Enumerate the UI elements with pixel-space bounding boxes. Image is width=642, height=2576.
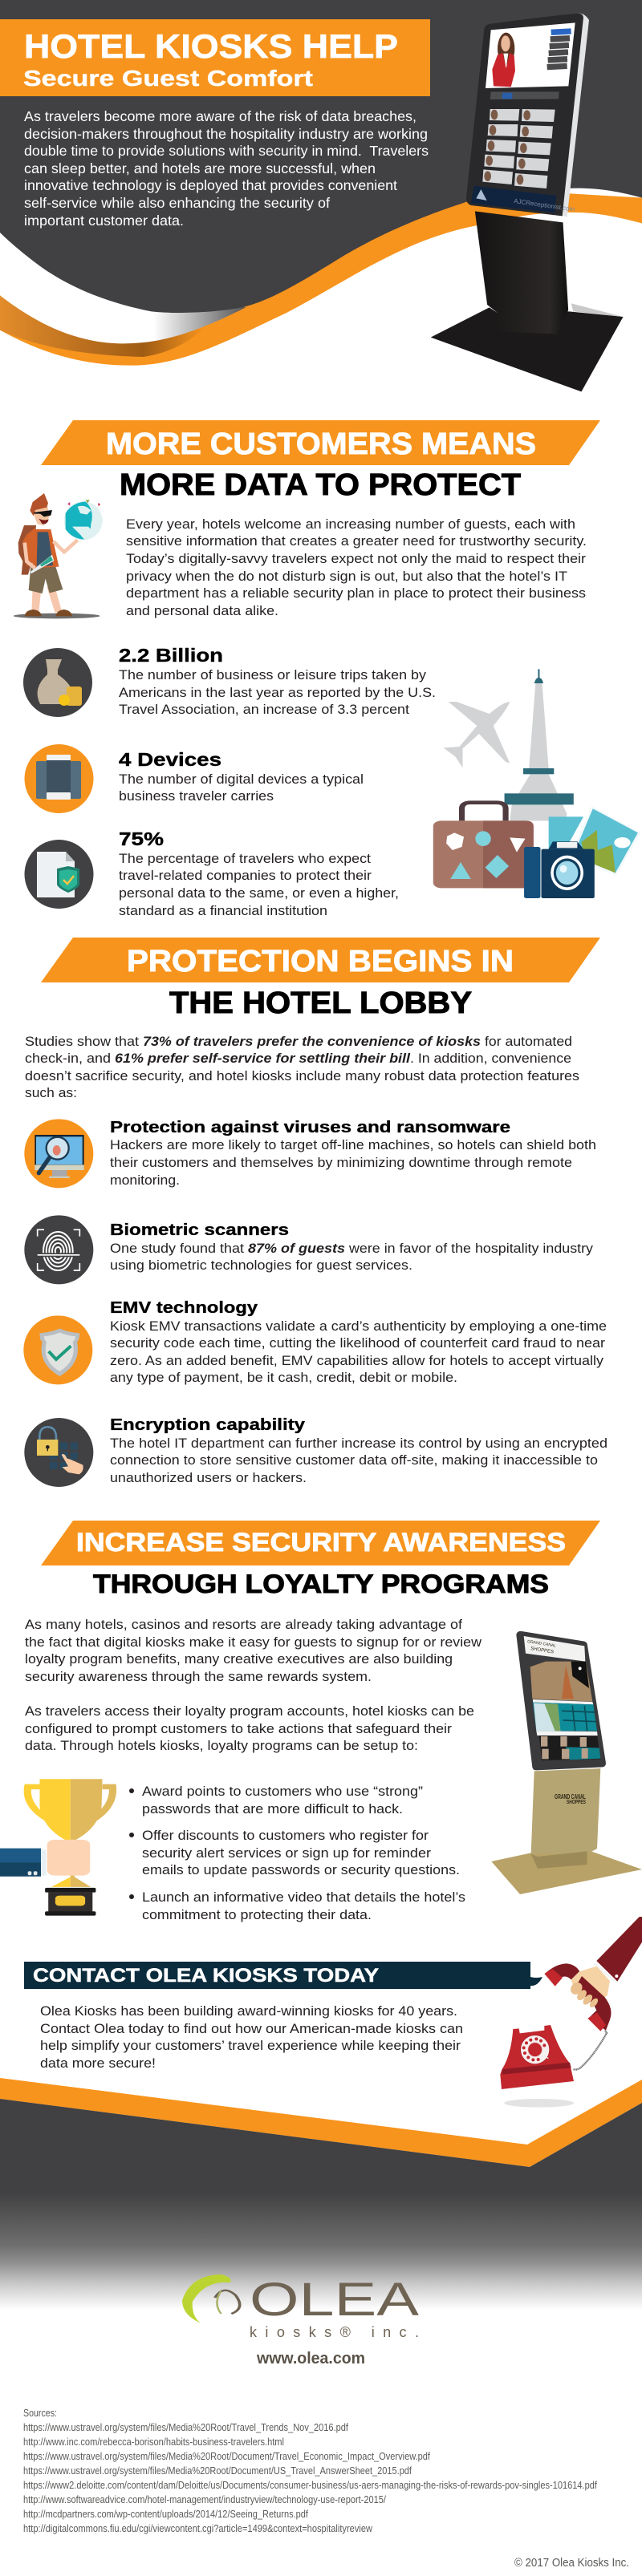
kiosk footer label: AJCReceptionist.com [514,197,575,213]
illustration: red telephone and hand [500,1917,642,2108]
illustration: photos and camera [524,806,640,898]
bullet list: commitment to protecting their data. [142,1907,372,1922]
section 2 paragraph: check-in, and [25,1051,111,1066]
section 2 paragraph: . In addition, convenience [410,1051,571,1066]
sources: http://www.inc.com/rebecca-borison/habits-business-travelers.html [23,2436,284,2448]
icon: security shield [23,1315,92,1384]
section 2 paragraph: Studies show that [25,1034,139,1049]
section 3 paragraphs: security awareness through the same rewards system. [25,1669,372,1684]
title banner: HOTEL KIOSKS HELP [24,27,398,65]
bullet list: passwords that are more difficult to hack. [142,1801,403,1817]
section 3 heading: THROUGH LOYALTY PROGRAMS [93,1569,549,1598]
feature: encryption capability: unauthorized users or hackers. [110,1470,307,1485]
kiosk branding: SHOPPES [567,1800,586,1805]
feature: EMV technology [110,1299,607,1385]
logo wordmark [250,2274,419,2340]
section 3 paragraphs: the fact that digital kiosks make it easy for guests to signup for or review [25,1634,482,1650]
feature: protection against viruses: Hackers are more likely to target off-line machines, so hotels can shield both [110,1137,596,1152]
bullet list: Award points to customers who use “strong” [142,1784,423,1799]
intro paragraph: innovative technology is deployed that provides convenient [24,177,397,193]
section 3 paragraphs: configured to prompt customers to take actions that safeguard their [25,1721,452,1736]
section 2 paragraph [25,1034,579,1100]
feature: encryption capability: connection to store sensitive customer data off-site, making it inaccessible to [110,1452,598,1468]
kiosk stand [431,211,624,391]
feature: biometric scanners [110,1221,594,1273]
website: www.olea.com [256,2350,365,2367]
icon: money bag [23,648,92,717]
section 1 heading: MORE DATA TO PROTECT [120,468,521,502]
illustration: suitcase with stickers [433,803,534,888]
section 3 paragraphs: loyalty program benefits, many creative executives are also building [25,1651,453,1667]
footer background [0,2078,642,2310]
stat: 4 devices: business traveler carries [119,788,274,804]
illustration: traveler with globe [14,493,103,618]
section 3 paragraphs: As many hotels, casinos and resorts are already taking advantage of [25,1617,462,1632]
stat: 2.2 billion: The number of business or leisure trips taken by [119,667,427,682]
stat: 4 devices [119,749,364,804]
contact paragraph: data more secure! [40,2056,156,2071]
section 3 banner [41,1521,600,1565]
logo wordmark: OLEA [250,2274,419,2326]
icon: virus scan monitor [24,1119,93,1188]
feature: EMV technology: EMV technology [110,1299,258,1317]
stat: 2.2 billion: Americans in the last year as reported by the U.S. [119,685,436,700]
contact paragraph: Contact Olea today to find out how our American-made kiosks can [40,2021,463,2036]
bullet list: security alert services or sign up for reminder [142,1845,431,1861]
contact paragraph: help simplify your customers’ travel experience while keeping their [40,2038,461,2053]
stat: 2.2 billion: 2.2 Billion [119,645,223,666]
background wave: dark header with orange ribbon [0,0,642,366]
section 1 paragraph: and personal data alike. [126,603,278,618]
contact banner: CONTACT OLEA KIOSKS TODAY [33,1965,379,1987]
feature: biometric scanners: 87% of guests [248,1241,345,1256]
section 1 paragraph [126,516,587,618]
stat: 75 percent: The percentage of travelers who expect [119,851,371,866]
feature: biometric scanners: were in favor of the hospitality industry [348,1241,594,1256]
kiosk branding: GRAND CANAL [555,1793,586,1800]
section 1 paragraph: sensitive information that creates a greater need for trustworthy security. [126,533,587,549]
section 3 banner: INCREASE SECURITY AWARENESS [76,1528,566,1557]
stat: 75 percent: personal data to the same, or even a higher, [119,885,399,901]
feature: biometric scanners: using biometric technologies for guest services. [110,1258,412,1273]
feature: protection against viruses: monitoring. [110,1173,180,1188]
sources: Sources: [23,2408,57,2419]
section 2 banner [41,938,600,982]
icon: digital devices [24,744,93,813]
section 3 paragraphs: data. Through hotels kiosks, loyalty programs can be setup to: [25,1738,418,1753]
kiosk screen [466,14,589,217]
illustration: trophy held by hand [0,1779,113,1916]
stat: 4 devices: The number of digital devices a typical [119,772,364,787]
section 2 paragraph: such as: [25,1085,77,1100]
stat: 75 percent [119,828,399,918]
illustration: plane and eiffel tower [444,669,574,820]
section 1 paragraph: privacy when the do not disturb sign is out, but also that the hotel’s IT [126,569,567,584]
title banner [0,19,430,96]
section 2 paragraph: doesn’t sacrifice security, and hotel kiosks include many robust data protection features [25,1068,579,1083]
icon: document with shield [24,840,93,909]
intro paragraph: As travelers become more aware of the risk of data breaches, [24,108,416,124]
sources [23,2408,597,2534]
logo wordmark: kiosks® inc. [250,2324,419,2340]
section 2 paragraph: 61% prefer self-service for settling their bill [115,1051,411,1066]
feature: encryption capability [110,1416,607,1485]
illustration: gold kiosk [491,1631,642,1894]
feature: EMV technology: security code each time, cutting the likelihood of counterfeit card fraud to near [110,1335,605,1351]
section 3 paragraphs: As travelers access their loyalty program accounts, hotel kiosks can be [25,1703,474,1719]
sources: http://www.softwareadvice.com/hotel-management/industryview/technology-use-report-2015/ [23,2494,386,2505]
bullet list: Launch an informative video that details the hotel’s [142,1889,465,1905]
copyright: © 2017 Olea Kiosks Inc. [514,2557,629,2570]
stat: 2.2 billion: Travel Association, an increase of 3.3 percent [119,702,409,717]
logo mark [182,2274,240,2323]
feature: protection against viruses: their customers and themselves by minimizing downtime through remote [110,1155,572,1170]
feature: protection against viruses [110,1119,596,1188]
section 1 banner [41,420,600,465]
intro paragraph: important customer data. [24,213,184,229]
contact paragraph: Olea Kiosks has been building award-winning kiosks for 40 years. [40,2003,457,2019]
section 2 heading: THE HOTEL LOBBY [169,986,472,1020]
feature: protection against viruses: Protection against viruses and ransomware [110,1119,510,1136]
kiosk branding [527,1639,586,1805]
stat: 4 devices: 4 Devices [119,749,221,770]
contact paragraph [40,2003,463,2071]
sources: http://digitalcommons.fiu.edu/cgi/viewcontent.cgi?article=1499&context=hospitalityreview [23,2523,373,2534]
section 1 banner: MORE CUSTOMERS MEANS [106,427,536,461]
sources: https://www.ustravel.org/system/files/Media%20Root/Document/US_Travel_AnswerSheet_2015.pdf [23,2465,412,2477]
feature: EMV technology: zero. As an added benefit, EMV capabilities allow for hotels to accept virtually [110,1353,604,1368]
section 1 paragraph: Every year, hotels welcome an increasing number of guests, each with [126,516,575,532]
kiosk branding: GRAND CANAL [527,1639,557,1649]
intro paragraph: can sleep better, and hotels are more successful, when [24,160,376,176]
stat: 75 percent: standard as a financial institution [119,903,327,918]
feature: encryption capability: The hotel IT department can further increase its control by using an encrypted [110,1436,607,1451]
sources: http://mcdpartners.com/wp-content/uploads/2014/12/Seeing_Returns.pdf [23,2509,308,2520]
icon: fingerprint scanner [24,1215,93,1284]
stat: 2.2 billion [119,645,436,717]
contact banner [24,1962,542,1989]
stat: 75 percent: 75% [119,828,164,849]
intro paragraph: double time to provide solutions with security in mind. Travelers [24,143,429,159]
bullet list: Offer discounts to customers who register for [142,1828,429,1843]
stat: 75 percent: travel-related companies to protect their [119,868,372,883]
title banner: Secure Guest Comfort [23,66,313,91]
section 3 paragraphs [25,1617,482,1753]
icon: padlock and keypad [24,1418,93,1487]
section 1 paragraph: department has a reliable security plan in place to protect their business [126,585,586,601]
section 2 banner: PROTECTION BEGINS IN [127,945,514,978]
section 1 paragraph: Today’s digitally-savvy travelers expect not only the maid to respect their [126,551,586,566]
intro paragraph: self-service while also enhancing the security of [24,195,330,211]
section 2 paragraph: for automated [485,1034,572,1049]
sources: https://www.ustravel.org/system/files/Media%20Root/Travel_Trends_Nov_2016.pdf [23,2422,348,2433]
feature: encryption capability: Encryption capability [110,1416,306,1434]
intro paragraph: decision-makers throughout the hospitality industry are working [24,126,428,142]
feature: EMV technology: any type of payment, be it cash, credit, debit or mobile. [110,1370,457,1385]
bullet list [129,1784,465,1922]
sources: https://www.ustravel.org/system/files/Media%20Root/Document/Travel_Economic_Impact_Overview.pdf [23,2451,430,2462]
feature: biometric scanners: One study found that [110,1241,244,1256]
intro paragraph [24,108,429,229]
feature: EMV technology: Kiosk EMV transactions validate a card’s authenticity by employing a one-time [110,1318,607,1334]
kiosk branding: SHOPPES [530,1646,554,1655]
bullet list: emails to update passwords or security questions. [142,1862,460,1877]
feature: biometric scanners: Biometric scanners [110,1221,289,1239]
section 2 paragraph: 73% of travelers prefer the convenience of kiosks [143,1034,481,1049]
